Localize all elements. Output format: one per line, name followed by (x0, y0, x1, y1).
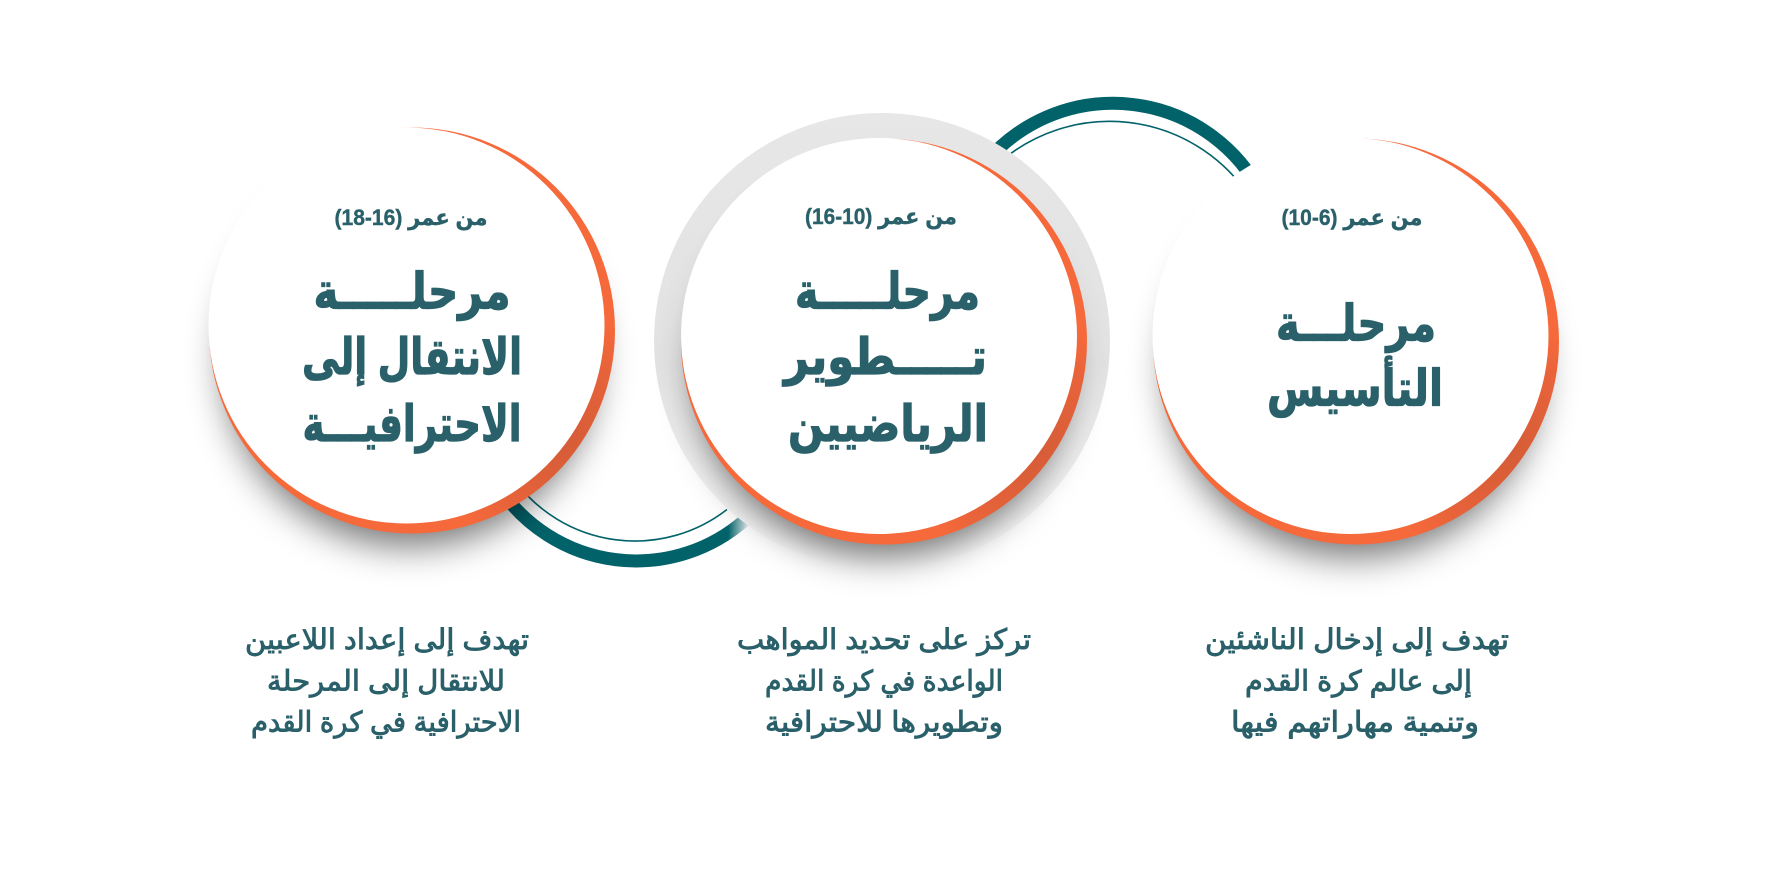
title: مرحلـــــة (314, 264, 510, 322)
age label: من عمر (6-10) (1281, 205, 1422, 231)
connector arc: bottom, between stage 3 and stage 2 (500, 481, 745, 561)
title: مرحلـــة (1276, 296, 1436, 354)
age label: من عمر (10-16) (805, 204, 957, 230)
description: إلى عالم كرة القدم (1245, 666, 1472, 698)
shadow (1168, 185, 1540, 557)
orange crescent (681, 138, 1087, 544)
title: الاحترافيـــة (302, 396, 522, 454)
panel: stage 1 (right) (1152, 138, 1559, 738)
description: تهدف إلى إدخال الناشئين (1205, 624, 1509, 656)
description: الاحترافية في كرة القدم (251, 706, 521, 738)
description (245, 624, 529, 738)
white disc (1152, 138, 1548, 534)
title (302, 264, 522, 454)
description (1205, 624, 1509, 738)
description: الواعدة في كرة القدم (765, 666, 1003, 698)
title: الانتقال إلى (302, 329, 522, 387)
connector arc: top, between stage 2 and stage 1 (985, 103, 1262, 195)
title: مرحلـــــة (795, 264, 980, 322)
title (1267, 296, 1443, 418)
grey ring (654, 113, 1110, 569)
panel: stage 3 (left) (208, 128, 615, 738)
title: التأسيس (1267, 356, 1443, 418)
description: للانتقال إلى المرحلة (267, 666, 505, 698)
description: تركز على تحديد المواهب (737, 624, 1031, 656)
age label: من عمر (16-18) (334, 205, 488, 231)
orange crescent (209, 128, 615, 534)
shadow (696, 185, 1068, 557)
shadow (224, 174, 596, 546)
title: تـــــطوير (781, 329, 987, 387)
title (781, 264, 988, 454)
description: تهدف إلى إعداد اللاعبين (245, 624, 529, 656)
white disc (681, 138, 1077, 534)
title: الرياضيين (788, 396, 988, 454)
white disc (208, 128, 604, 524)
orange crescent (1153, 138, 1559, 544)
panel: stage 2 (centre) (654, 113, 1110, 738)
description: وتنمية مهاراتهم فيها (1231, 706, 1479, 738)
description (737, 624, 1031, 738)
description: وتطويرها للاحترافية (765, 706, 1003, 738)
